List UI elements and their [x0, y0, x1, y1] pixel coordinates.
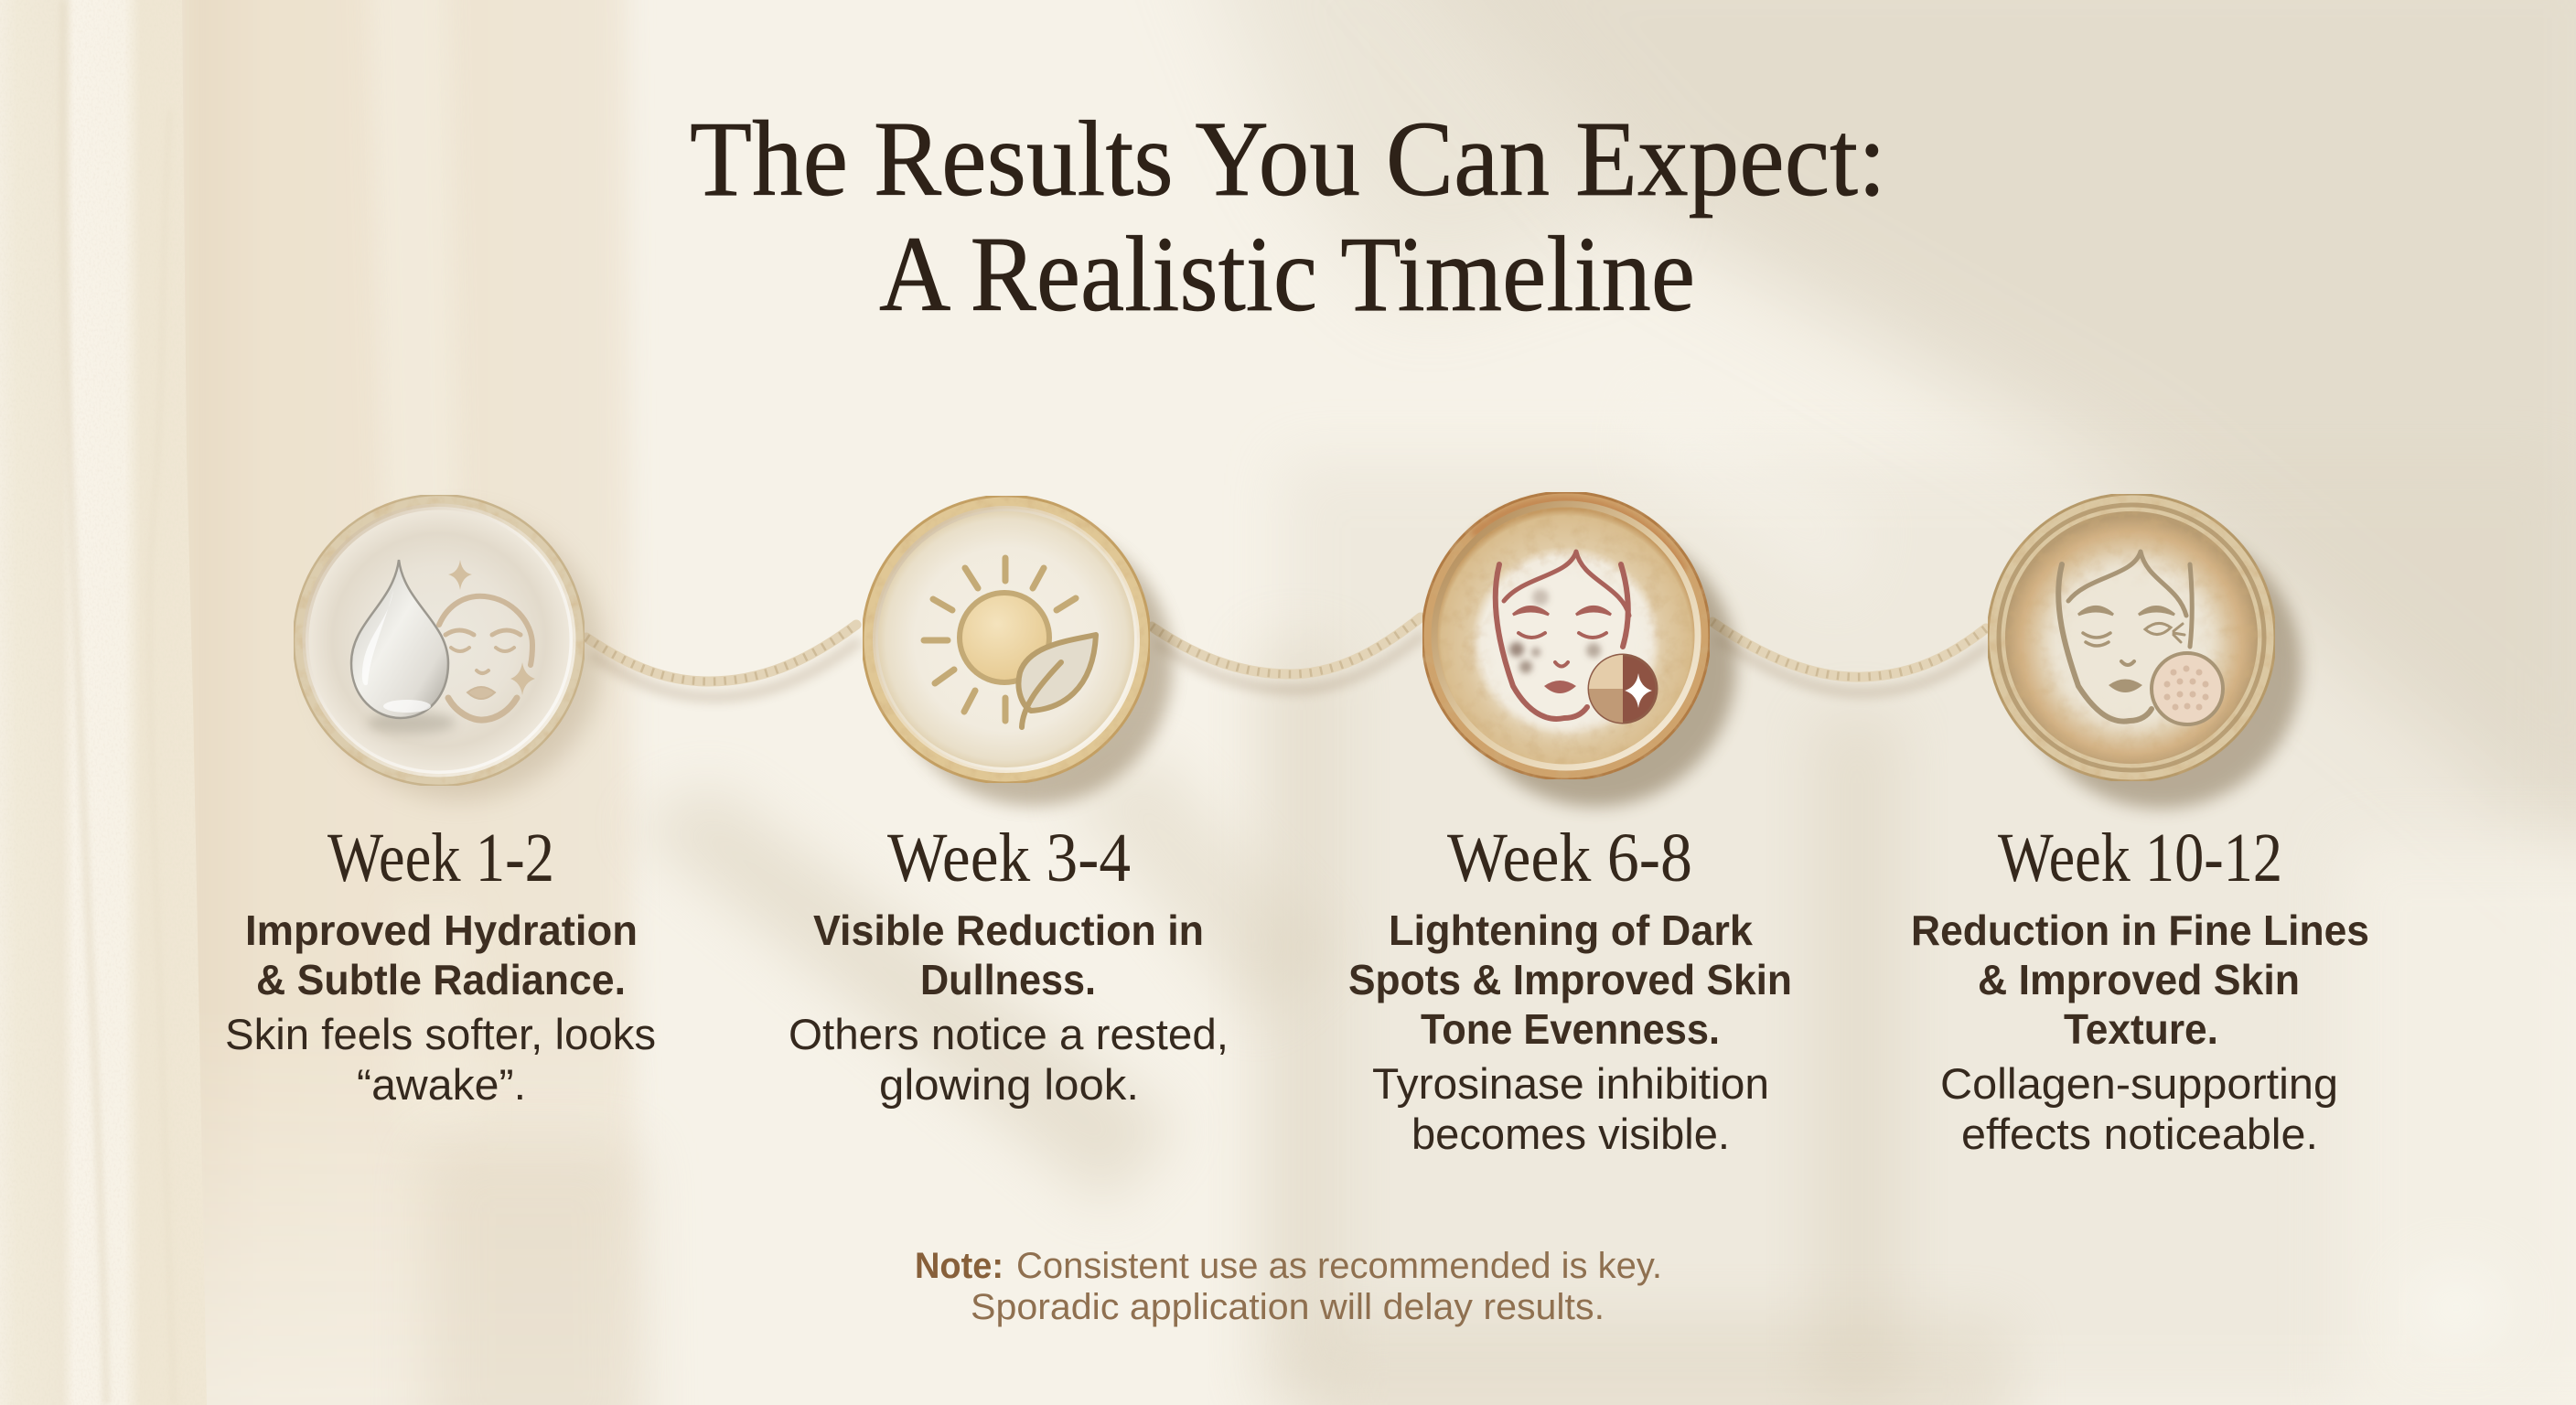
description: Skin feels softer: Skin feels softer, looks — [225, 1010, 656, 1058]
icon: tone comparison circle — [1589, 655, 1657, 723]
panel: Week 3-4 — [789, 496, 1229, 1109]
description: Skin feels softer — [225, 1010, 656, 1109]
benefit: Improved Hydration: Improved Hydration — [245, 906, 638, 954]
benefit: Improved Hydration — [245, 906, 638, 1003]
description: Tyrosinase inhibition: becomes visible. — [1411, 1110, 1730, 1158]
rope connectors — [586, 617, 1991, 697]
note: Sporadic application will delay results. — [971, 1287, 1605, 1327]
description: Skin feels softer: “awake”. — [357, 1060, 526, 1109]
description: Collagen-supporting: Collagen-supporting — [1940, 1059, 2338, 1108]
icon: blemish spots — [1509, 589, 1601, 673]
note: Consistent use as recommended is key. — [1016, 1246, 1662, 1286]
panel: Week 10-12 — [1911, 494, 2369, 1158]
benefit: Reduction in Fine Lines: Texture. — [2064, 1005, 2218, 1053]
ceramic plate: hydration icon — [294, 495, 602, 799]
benefit: Visible Reduction in Dullness: Dullness. — [920, 956, 1096, 1003]
icon: sun — [924, 558, 1076, 721]
ceramic plate: dark spots face icon — [1422, 492, 1736, 807]
benefit: Reduction in Fine Lines: & Improved Skin — [1978, 956, 2300, 1003]
benefit: Lightening of Dark Spots: Spots & Improved Skin — [1348, 956, 1792, 1003]
benefit: Improved Hydration: & Subtle Radiance. — [256, 956, 626, 1003]
panel: Week 6-8 — [1348, 492, 1792, 1158]
title: A Realistic Timeline — [879, 214, 1695, 334]
title: The Results You Can Expect: — [690, 99, 1886, 219]
heading: Week 6-8: Week 6-8 — [1447, 820, 1692, 896]
benefit: Reduction in Fine Lines: Reduction in Fine Lines — [1911, 906, 2369, 954]
sheer curtain — [0, 0, 207, 1405]
description: Collagen-supporting: effects noticeable. — [1961, 1110, 2318, 1158]
benefit: Reduction in Fine Lines — [1911, 906, 2369, 1053]
description: Tyrosinase inhibition — [1372, 1059, 1769, 1158]
benefit: Visible Reduction in Dullness: Visible Reduction in — [813, 906, 1204, 954]
icon: water drop — [351, 560, 456, 734]
description: Collagen-supporting — [1940, 1059, 2338, 1158]
heading: Week 1-2: Week 1-2 — [327, 820, 554, 896]
description: Others notice: glowing look. — [879, 1060, 1139, 1109]
title — [690, 99, 1886, 334]
heading: Week 10-12: Week 10-12 — [1998, 820, 2282, 896]
description: Others notice — [789, 1010, 1229, 1109]
description: Others notice: Others notice a rested, — [789, 1010, 1229, 1058]
panel: Week 1-2 — [225, 495, 656, 1109]
benefit: Lightening of Dark Spots: Tone Evenness. — [1421, 1005, 1720, 1053]
benefit: Visible Reduction in Dullness — [813, 906, 1204, 1003]
note: Note: — [915, 1246, 1004, 1286]
benefit: Lightening of Dark Spots — [1348, 906, 1792, 1053]
icon: face outline with wrinkles — [2058, 552, 2192, 722]
icon: leaf — [1018, 635, 1096, 727]
heading: Week 3-4: Week 3-4 — [887, 820, 1131, 896]
note — [915, 1246, 1662, 1327]
description: Tyrosinase inhibition: Tyrosinase inhibition — [1372, 1059, 1769, 1108]
ceramic plate: fine lines face icon — [1988, 494, 2302, 809]
benefit: Lightening of Dark Spots: Lightening of Dark — [1389, 906, 1753, 954]
ceramic plate: sun and leaf icon — [863, 496, 1173, 806]
icon: face outline — [1496, 552, 1629, 719]
icon: skin texture circle — [2152, 653, 2223, 724]
icon: face with sparkles — [439, 560, 535, 720]
